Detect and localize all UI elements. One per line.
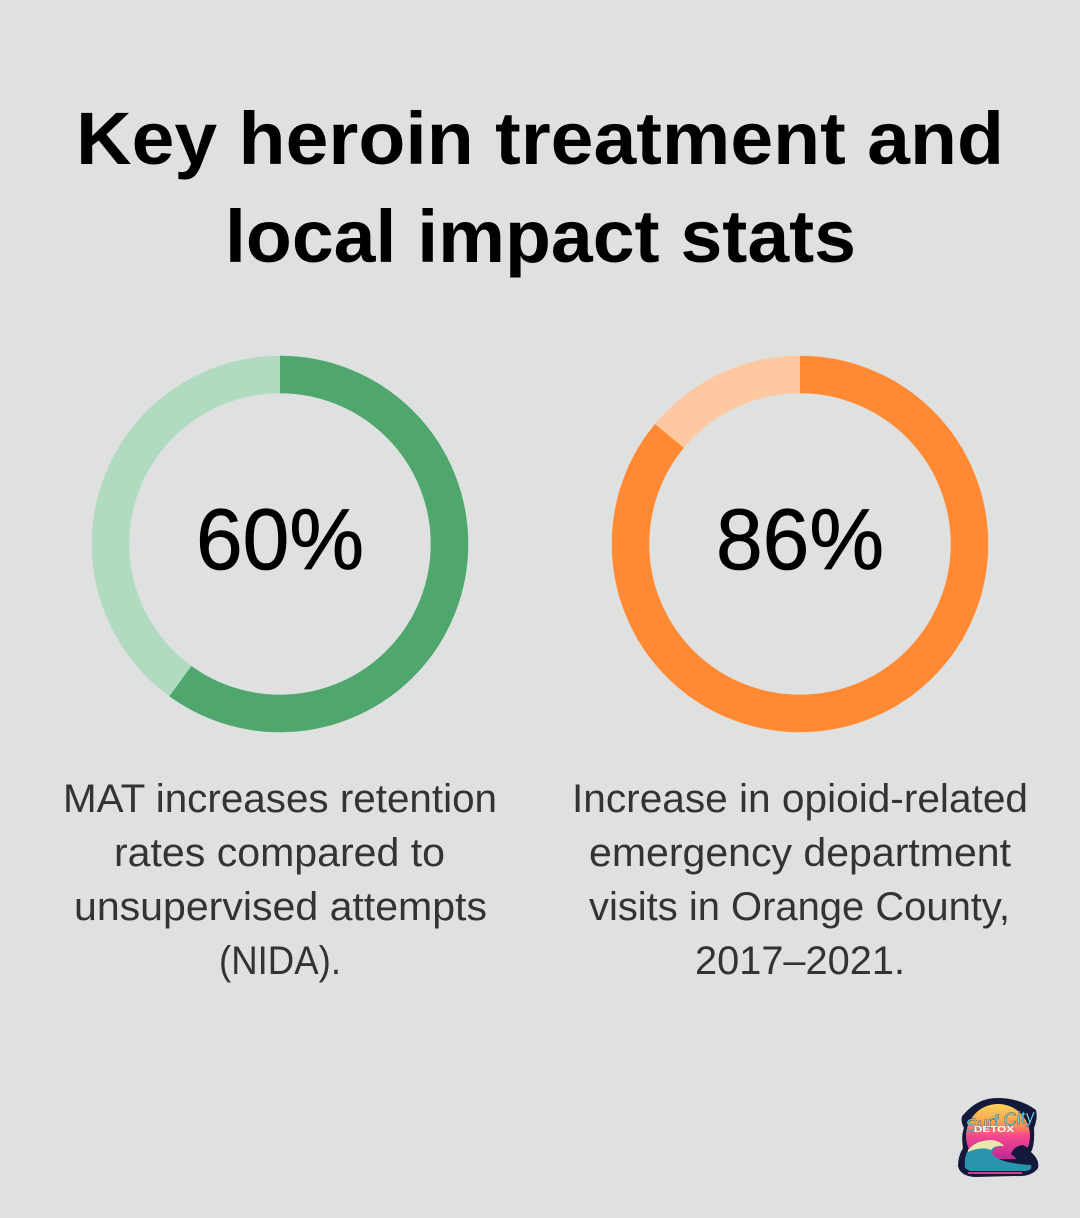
- description: emergency department visits: [572, 777, 1028, 983]
- stat: 60%: 60%: [196, 492, 364, 588]
- logo wave: [965, 1141, 1031, 1171]
- description: emergency department visits: emergency department: [589, 831, 1011, 875]
- donut chart: 86%: [630, 374, 970, 714]
- panel: 86 percent stat: [572, 374, 1028, 983]
- logo wave crest: [968, 1140, 1004, 1152]
- title: local impact stats: [225, 195, 856, 278]
- description: MAT retention: rates compared to: [114, 831, 445, 875]
- stat: 86%: 86%: [716, 492, 884, 588]
- logo palm tree: [1011, 1145, 1030, 1160]
- logo wordmark: Surf City: [964, 1106, 1037, 1136]
- description: MAT retention: MAT increases retention: [63, 777, 497, 821]
- logo: Surf City Detox badge: [958, 1098, 1038, 1177]
- panel: 60 percent stat: [63, 374, 497, 983]
- description: emergency department visits: Increase in opioid-related: [572, 777, 1028, 821]
- description: emergency department visits: 2017–2021.: [695, 939, 905, 983]
- title: [76, 97, 1004, 278]
- logo detox label: DETOX: [974, 1125, 1015, 1134]
- description: MAT retention: (NIDA).: [219, 939, 341, 983]
- description: MAT retention: [63, 777, 497, 983]
- description: MAT retention: unsupervised attempts: [74, 885, 487, 929]
- logo ground stripe: [968, 1172, 1022, 1174]
- title: Key heroin treatment and: [76, 97, 1004, 180]
- donut chart: 60%: [110, 374, 450, 714]
- description: emergency department visits: visits in Orange County,: [589, 885, 1010, 929]
